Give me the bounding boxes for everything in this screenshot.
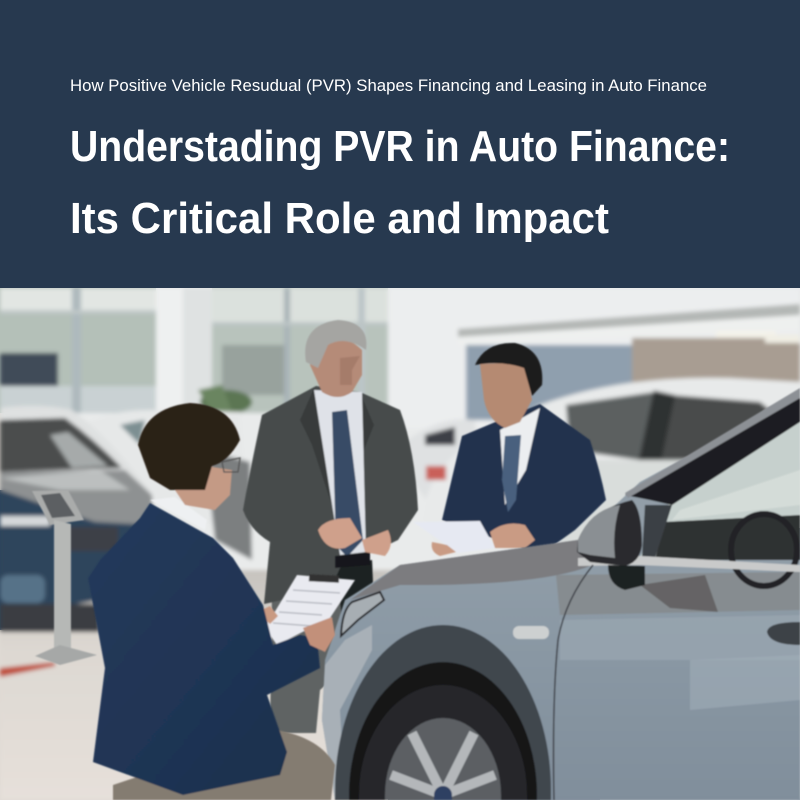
front bumper highlight: [322, 625, 372, 800]
jacket: [88, 503, 320, 795]
plant: [198, 385, 252, 414]
belt chrome line: [578, 556, 800, 572]
wheel arch: [335, 625, 551, 800]
trousers: [113, 730, 335, 800]
grey left car: [0, 406, 155, 560]
hand right: [303, 617, 335, 652]
shirt: [500, 408, 540, 505]
man in navy suit: [413, 343, 606, 556]
small car behind right: [405, 419, 480, 520]
rim: [385, 718, 501, 800]
title: Understading PVR in Auto Finance:: [70, 122, 730, 171]
tie: [502, 435, 521, 512]
suit jacket: [243, 386, 418, 604]
subtitle: How Positive Vehicle Resudual (PVR) Shapes Financing and Leasing in Auto Finance: [70, 77, 707, 95]
wheel well: [349, 662, 537, 800]
face: [310, 336, 362, 397]
paper: [413, 521, 495, 553]
collar: [150, 497, 207, 530]
right wall and ceiling: [388, 288, 800, 428]
hood upper band: [350, 540, 590, 600]
shirt: [314, 390, 366, 555]
grey hair: [305, 320, 366, 368]
hand left: [258, 606, 278, 624]
showroom background: [0, 288, 800, 800]
lapels: [300, 388, 374, 540]
blue car: [0, 490, 160, 632]
belt: [335, 552, 370, 568]
door reflections: [556, 572, 800, 710]
kneeling young man: [88, 403, 355, 800]
tie: [332, 410, 363, 557]
center windows: [212, 288, 388, 413]
spokes: [391, 733, 495, 795]
hair: [138, 403, 240, 490]
tire: [359, 685, 527, 800]
dark lower trousers: [335, 560, 374, 640]
roof pillar: [625, 388, 800, 505]
fender handle: [513, 626, 549, 639]
photo base tones: [0, 288, 800, 800]
face shadow: [340, 356, 360, 385]
face: [480, 362, 532, 428]
steering wheel: [731, 514, 797, 586]
white car behind left: [80, 410, 250, 540]
display stand: [32, 490, 97, 665]
jacket: [442, 404, 606, 555]
hair: [475, 343, 542, 396]
left windows: [0, 288, 156, 413]
mirror: [577, 500, 642, 566]
hub: [434, 786, 452, 800]
dark car behind center: [205, 450, 252, 560]
right white car: [422, 378, 800, 570]
title: Its Critical Role and Impact: [70, 194, 609, 243]
door handle: [767, 622, 800, 645]
mirror stem: [608, 565, 645, 590]
title: [70, 122, 730, 243]
header panel: [0, 0, 800, 288]
neck and face: [175, 465, 232, 510]
hands: [318, 518, 391, 556]
window interior: [640, 420, 800, 560]
foreground silver car: [322, 388, 800, 800]
floor: [0, 570, 420, 800]
hands: [432, 524, 535, 556]
glasses: [222, 458, 240, 472]
headlight: [341, 592, 384, 636]
column: [156, 288, 212, 413]
showroom photo illustration: [0, 288, 800, 800]
older man: [243, 320, 418, 733]
trousers: [270, 560, 376, 733]
door seam: [554, 565, 593, 800]
car body: [322, 395, 800, 800]
clipboard: [265, 574, 355, 645]
